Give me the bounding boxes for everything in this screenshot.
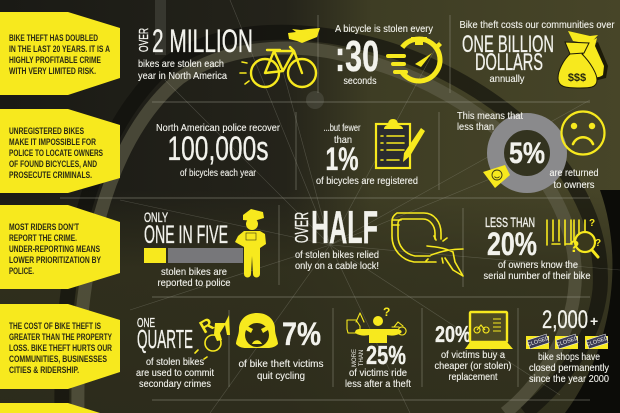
icon: closed signs: CLOSED [586, 336, 609, 348]
icon: sad face [562, 112, 604, 154]
stat: over 2 million: 2 MILLION [152, 23, 253, 59]
stat: 2,000+ shops closed: since the year 2000 [529, 373, 609, 385]
stat: one quarter: ONE [137, 315, 155, 330]
stat: 2,000+ shops closed: 2,000 [542, 306, 588, 334]
text: this means less than: This means that [457, 110, 523, 122]
icon: serial barcode and magnifier [547, 218, 601, 257]
text: this means less than [457, 110, 523, 133]
icon: money bags [558, 31, 608, 88]
icon: cut cable lock [392, 213, 463, 276]
stat: one billion dollars [460, 19, 615, 85]
stat: 20% replacement [434, 321, 512, 383]
icon: closed signs: CLOSED [556, 336, 579, 348]
stat: one in five [144, 209, 243, 289]
stat: one billion dollars: DOLLARS [475, 49, 543, 76]
panel: cost callout [0, 304, 120, 389]
stat: over half: HALF [311, 201, 378, 253]
panel: under-reporting callout: POLICE. [9, 266, 34, 277]
stat: more than 25%: 25% [366, 340, 406, 370]
icon: serial barcode and magnifier: ? [569, 237, 579, 256]
stat: over 2 million [136, 23, 253, 82]
icon: bicycle with hand [240, 28, 320, 87]
icon: police officer [235, 209, 266, 278]
icon: fleeing cyclist: R [196, 314, 217, 337]
text: this means less than: less than [457, 121, 494, 133]
panel: doubled callout: HIGHLY PROFITABLE CRIME [9, 55, 101, 66]
icon: serial barcode and magnifier: ? [589, 218, 595, 229]
panel: unregistered callout: PROSECUTE CRIMINALS. [9, 170, 92, 181]
icon: laptop [465, 312, 513, 349]
stat: over half: OVER [292, 212, 312, 243]
stat: fewer than 1%: than [334, 134, 352, 146]
stat: over 2 million: bikes are stolen each [138, 58, 224, 70]
stat: over half: of stolen bikes relied [295, 249, 379, 261]
panel: unregistered callout: UNREGISTERED BIKES [9, 126, 84, 137]
panel: doubled callout: WITH VERY LIMITED RISK. [9, 66, 96, 77]
stat: one quarter [136, 315, 214, 390]
row divider lines [60, 15, 590, 400]
panel: unregistered callout: OF FOUND BICYCLES, AND [9, 159, 97, 170]
stat: one in five: reported to police [158, 277, 231, 289]
icon: fleeing cyclist [195, 314, 230, 359]
stat: over 2 million: year in North America [138, 70, 227, 82]
icon: closed signs: CLOSED [527, 336, 550, 348]
icon: smile tag [483, 165, 510, 188]
stat: one quarter: QUARTE [137, 324, 193, 354]
stat: 20% replacement: 20% [435, 321, 471, 347]
stat: 7% quit cycling: quit cycling [257, 370, 305, 382]
panel: doubled callout: BIKE THEFT HAS DOUBLED [9, 33, 98, 44]
stat: more than 25%: of victims ride [349, 367, 407, 379]
panel: cost callout: LOSS. BIKE THEFT HURTS OUR [9, 343, 112, 354]
stat: 20% replacement: replacement [448, 371, 498, 383]
stat: stolen every 30 seconds: seconds [344, 75, 376, 87]
text: returned to owners: to owners [554, 179, 594, 191]
panel: cost callout: GREATER THAN THE PROPERTY [9, 332, 112, 343]
text: returned to owners [550, 167, 599, 191]
chart: donut 5 percent [496, 122, 558, 184]
panel: under-reporting callout: UNDER-REPORTING MEANS [9, 244, 100, 255]
panel: under-reporting callout: REPORT THE CRIME. [9, 233, 77, 244]
stat: one in five: ONE IN FIVE [144, 221, 228, 249]
stat: 2,000+ shops closed: bike shops have [538, 351, 600, 363]
panel: unregistered callout [0, 109, 120, 193]
stat: fewer than 1% [316, 122, 418, 187]
stat: 20% replacement: cheaper (or stolen) [434, 360, 512, 372]
text: returned to owners: are returned [550, 167, 599, 179]
stat: less than 20%: of owners know the [498, 259, 578, 271]
stat: stolen every 30 seconds [335, 23, 434, 87]
panel: under-reporting callout: LOWER PRIORITIZATION BY [9, 255, 101, 266]
icon: person with car and bike [347, 305, 406, 343]
panel: cost callout: CITIES & RIDERSHIP. [9, 365, 79, 376]
icon: crying woman [236, 313, 278, 348]
stat: 2,000+ shops closed: closed permanently [529, 362, 610, 374]
panel: doubled callout [0, 12, 120, 95]
stat: one quarter: secondary crimes [139, 378, 211, 390]
stat: more than 25%: MORE [352, 349, 358, 367]
panel: unregistered callout: POLICE TO LOCATE OWNERS [9, 148, 103, 159]
stat: 7% quit cycling: 7% [282, 316, 321, 352]
stat: 20% replacement: of victims buy a [441, 349, 505, 361]
stat: 100,000s recovered [156, 122, 280, 179]
stat: more than 25%: less after a theft [345, 378, 411, 390]
stat: fewer than 1%: 1% [326, 141, 358, 177]
icon: money bags: $$$ [568, 72, 586, 84]
stat: less than 20%: LESS THAN [485, 214, 535, 230]
stat: 7% quit cycling: of bike theft victims [238, 358, 324, 370]
stat: fewer than 1%: ...but fewer [324, 122, 361, 134]
icon: closed signs [526, 334, 609, 349]
stat: 100,000s recovered: North American police recover [156, 122, 280, 134]
icon: clipboard and pencil [376, 119, 425, 168]
stat: stolen every 30 seconds: :30 [335, 32, 379, 81]
panel: cost callout: COMMUNITIES, BUSINESSES [9, 354, 107, 365]
stat: over 2 million: OVER [136, 28, 151, 52]
stat: over half [292, 201, 379, 272]
stat: less than 20% [484, 214, 591, 282]
panel: under-reporting callout [0, 205, 120, 289]
stat: over half: only on a cable lock! [295, 260, 379, 272]
stat: one in five: stolen bikes are [161, 266, 227, 278]
stat: one quarter: of stolen bikes [146, 356, 204, 368]
icon: stopwatch [386, 31, 448, 89]
stat: less than 20%: serial number of their bike [484, 270, 591, 282]
chart: donut 5 percent: 5% [509, 137, 545, 170]
stat: 100,000s recovered: 100,000s [168, 130, 268, 168]
icon: person with car and bike: ? [383, 305, 390, 319]
stat: fewer than 1%: of bicycles are registered [316, 175, 418, 187]
panel: next callout edge [0, 403, 100, 413]
stat: 100,000s recovered: of bicycles each year [180, 167, 256, 179]
stat: one in five: ONLY [144, 209, 168, 225]
stat: 2,000+ shops closed [529, 306, 610, 385]
panel: under-reporting callout: MOST RIDERS DON'T [9, 222, 79, 233]
stat: one quarter: are used to commit [136, 367, 214, 379]
panel: doubled callout: IN THE LAST 20 YEARS. IT IS A [9, 44, 110, 55]
stat: one billion dollars: ONE BILLION [462, 31, 554, 58]
stat: 2,000+ shops closed: + [590, 313, 598, 329]
stat: one billion dollars: annually [490, 73, 525, 85]
panel: unregistered callout: MAKE IT IMPOSSIBLE FOR [9, 137, 96, 148]
stat: less than 20%: 20% [487, 226, 537, 262]
icon: serial barcode and magnifier: ? [595, 238, 601, 249]
stat: more than 25% [345, 340, 411, 390]
stat: 7% quit cycling [238, 316, 324, 382]
panel: cost callout: THE COST OF BIKE THEFT IS [9, 321, 101, 332]
stat: more than 25%: THAN [359, 350, 365, 366]
stat: stolen every 30 seconds: A bicycle is stolen every [335, 23, 434, 35]
